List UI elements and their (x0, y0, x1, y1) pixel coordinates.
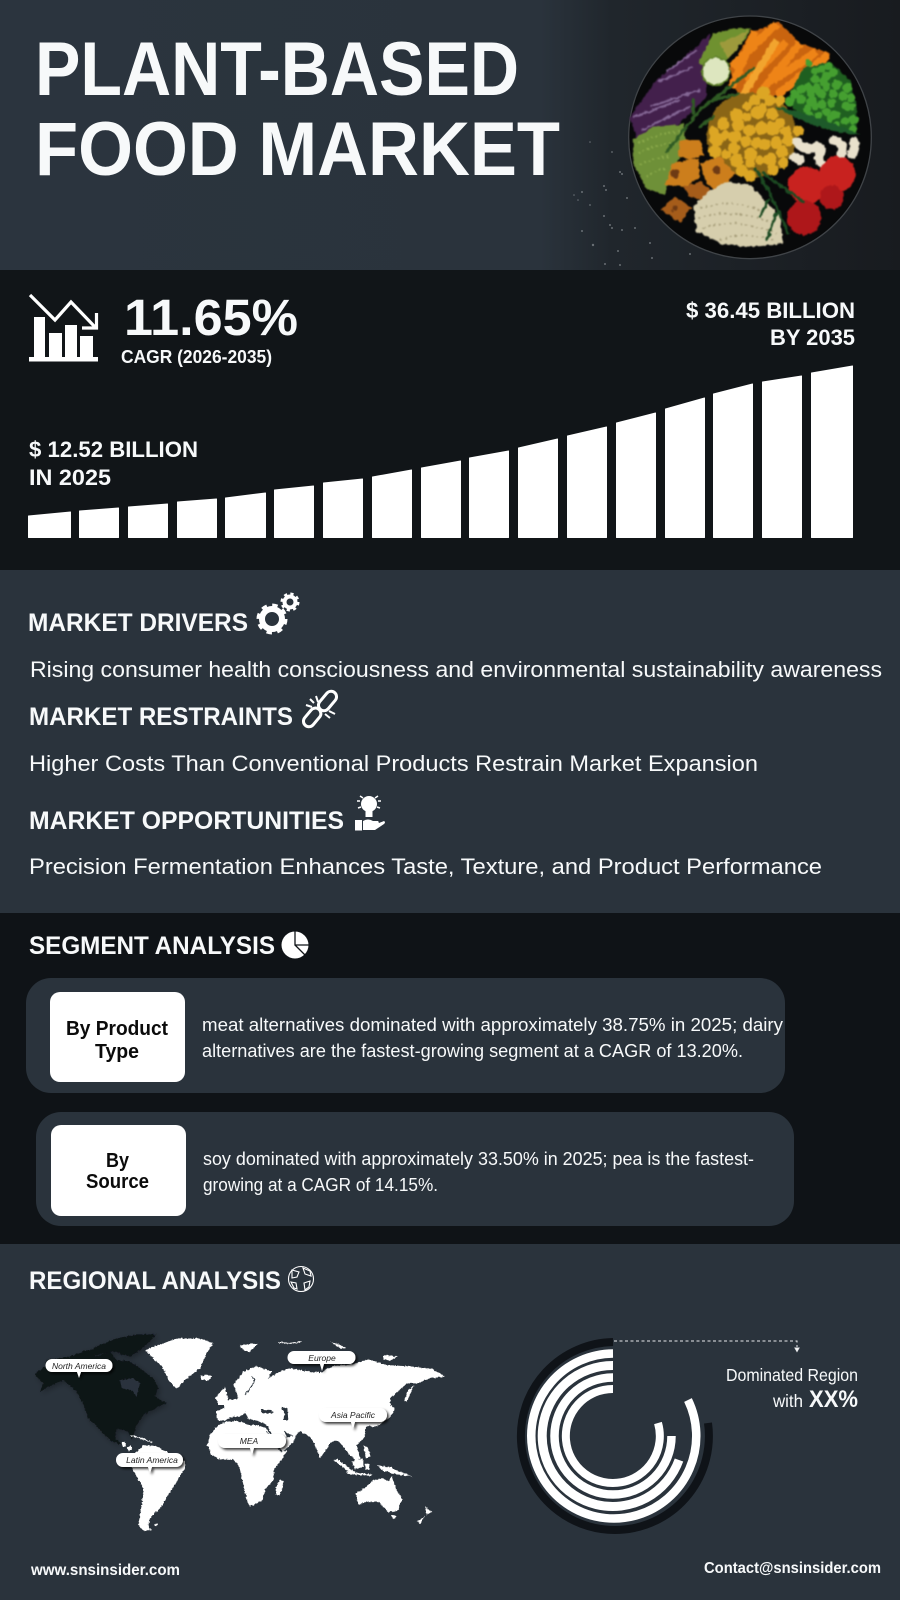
title: FOOD MARKET (35, 107, 560, 192)
icon: gears (258, 594, 298, 632)
icon: light bulb over hand (355, 796, 385, 830)
footer website: www.snsinsider.com (30, 1562, 180, 1579)
card: by source: By (106, 1150, 130, 1172)
panel: segment analysis (0, 913, 900, 1244)
CAGR value: 11.65% (124, 289, 298, 346)
dashed arrow (614, 1341, 799, 1352)
card: by product type: Type (95, 1041, 139, 1063)
heading: market drivers: MARKET DRIVERS (28, 609, 248, 637)
world map (35, 1334, 445, 1531)
heading: market opportunities: MARKET OPPORTUNITIES (29, 807, 344, 835)
heading: regional analysis: REGIONAL ANALYSIS (29, 1267, 281, 1295)
CAGR label: CAGR (2026-2035) (121, 347, 272, 367)
panel: regional analysis (0, 1244, 900, 1600)
card: by source: soy dominated with approximately 33.50% in 2025; pea is the fastest- (203, 1148, 754, 1169)
2025 market value: IN 2025 (29, 465, 111, 490)
2025 market value: $ 12.52 BILLION (29, 437, 198, 462)
2035 market value: BY 2035 (770, 325, 855, 350)
map callouts (46, 1351, 387, 1473)
food bowl illustration (629, 16, 871, 259)
2035 market value (686, 298, 855, 350)
card: by product type: alternatives are the fastest-growing segment at a CAGR of 13.20%. (202, 1040, 743, 1061)
icon: falling trend bar chart (29, 295, 98, 362)
dominated region label: Dominated Region (726, 1365, 858, 1385)
panel: market dynamics (0, 570, 900, 913)
panel: market size and CAGR (0, 270, 900, 570)
bar chart: market growth (28, 366, 852, 538)
2035 market value: $ 36.45 BILLION (686, 298, 855, 323)
heading: segment analysis: SEGMENT ANALYSIS (29, 932, 275, 960)
icon: broken chain (301, 689, 339, 729)
text: restraint: Higher Costs Than Conventional Products Restrain Market Expansion (29, 751, 758, 776)
radial chart: regional share (521, 1342, 709, 1530)
title (35, 27, 560, 192)
footer contact: Contact@snsinsider.com (704, 1560, 881, 1577)
icon: globe (288, 1266, 314, 1292)
card: by source (36, 1112, 794, 1226)
dominated region label: XX% (809, 1386, 858, 1413)
map callouts: North America (52, 1361, 106, 1371)
map callouts: MEA (240, 1436, 259, 1446)
dominated region label: with (772, 1391, 803, 1411)
card: by product type: meat alternatives dominated with approximately 38.75% in 2025; dairy (202, 1014, 784, 1035)
dominated region label (726, 1365, 858, 1413)
2025 market value (29, 437, 198, 490)
text: opportunity: Precision Fermentation Enhances Taste, Texture, and Product Performance (29, 854, 822, 879)
card: by product type (26, 978, 785, 1093)
map callouts: Latin America (126, 1455, 178, 1465)
card: by product type: By Product (66, 1018, 168, 1040)
icon: pie chart (282, 931, 309, 958)
title: PLANT-BASED (35, 27, 519, 112)
map callouts: Europe (308, 1353, 336, 1363)
eurasia, africa and oceania (200, 1342, 445, 1523)
panel: header (0, 0, 900, 270)
heading: market restraints: MARKET RESTRAINTS (29, 703, 293, 731)
north america highlighted (35, 1334, 167, 1444)
greenland, south america and americas islands (122, 1338, 228, 1531)
text: driver: Rising consumer health consciousness and environmental sustainability awareness (30, 657, 882, 682)
card: by source: Source (86, 1171, 149, 1193)
scattered sesame seeds (573, 141, 691, 266)
map callouts: Asia Pacific (330, 1410, 376, 1420)
card: by source: growing at a CAGR of 14.15%. (203, 1174, 438, 1195)
